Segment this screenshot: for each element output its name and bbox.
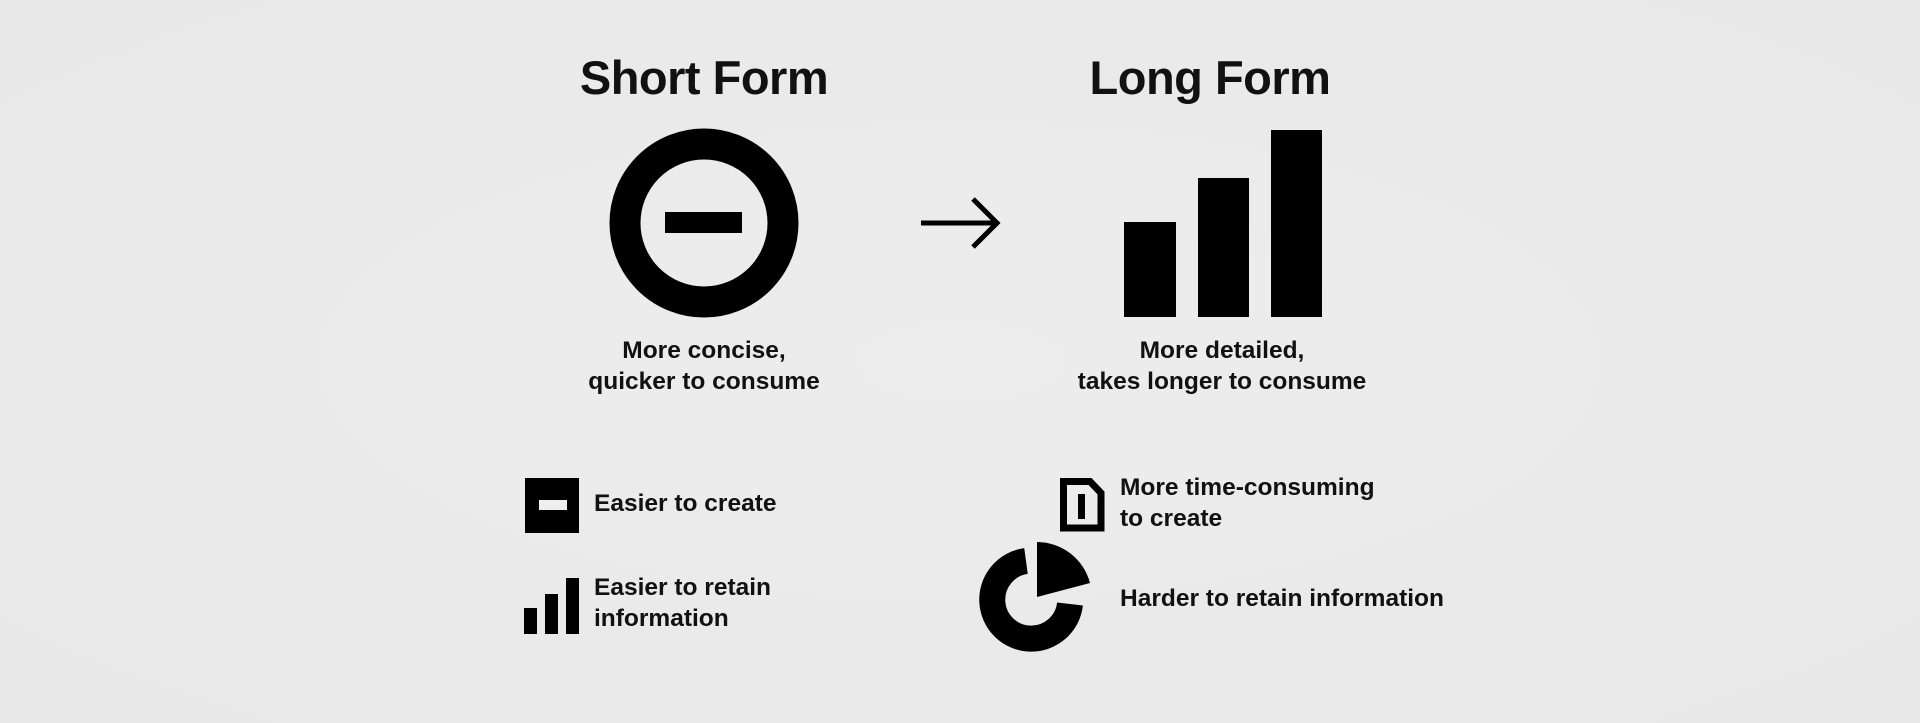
text: easier to create: Easier to create <box>594 490 776 517</box>
title: long form: Long Form <box>1090 51 1330 104</box>
text: more time-consuming: More time-consuming <box>1120 474 1375 501</box>
title: short form: Short Form <box>580 51 828 104</box>
text: easier to retain: Easier to retain <box>594 574 771 601</box>
icon: small bar chart <box>524 578 579 634</box>
caption: short form <box>588 337 820 395</box>
text: more time-consuming <box>1120 474 1375 532</box>
icon: document <box>1064 482 1101 528</box>
text: easier to retain <box>594 574 771 632</box>
icon: circle minus <box>625 144 783 302</box>
caption: long form: More detailed, <box>1140 337 1304 364</box>
icon: square minus <box>525 478 579 533</box>
caption: long form <box>1078 337 1366 395</box>
text: easier to retain: information <box>594 605 729 632</box>
text: more time-consuming: to create <box>1120 505 1222 532</box>
icon: pie chart <box>992 542 1090 639</box>
arrow <box>921 199 997 247</box>
icon: large bar chart <box>1124 130 1322 317</box>
text: harder to retain: Harder to retain information <box>1120 585 1444 612</box>
caption: long form: takes longer to consume <box>1078 368 1366 395</box>
caption: short form: quicker to consume <box>588 368 820 395</box>
caption: short form: More concise, <box>622 337 786 364</box>
